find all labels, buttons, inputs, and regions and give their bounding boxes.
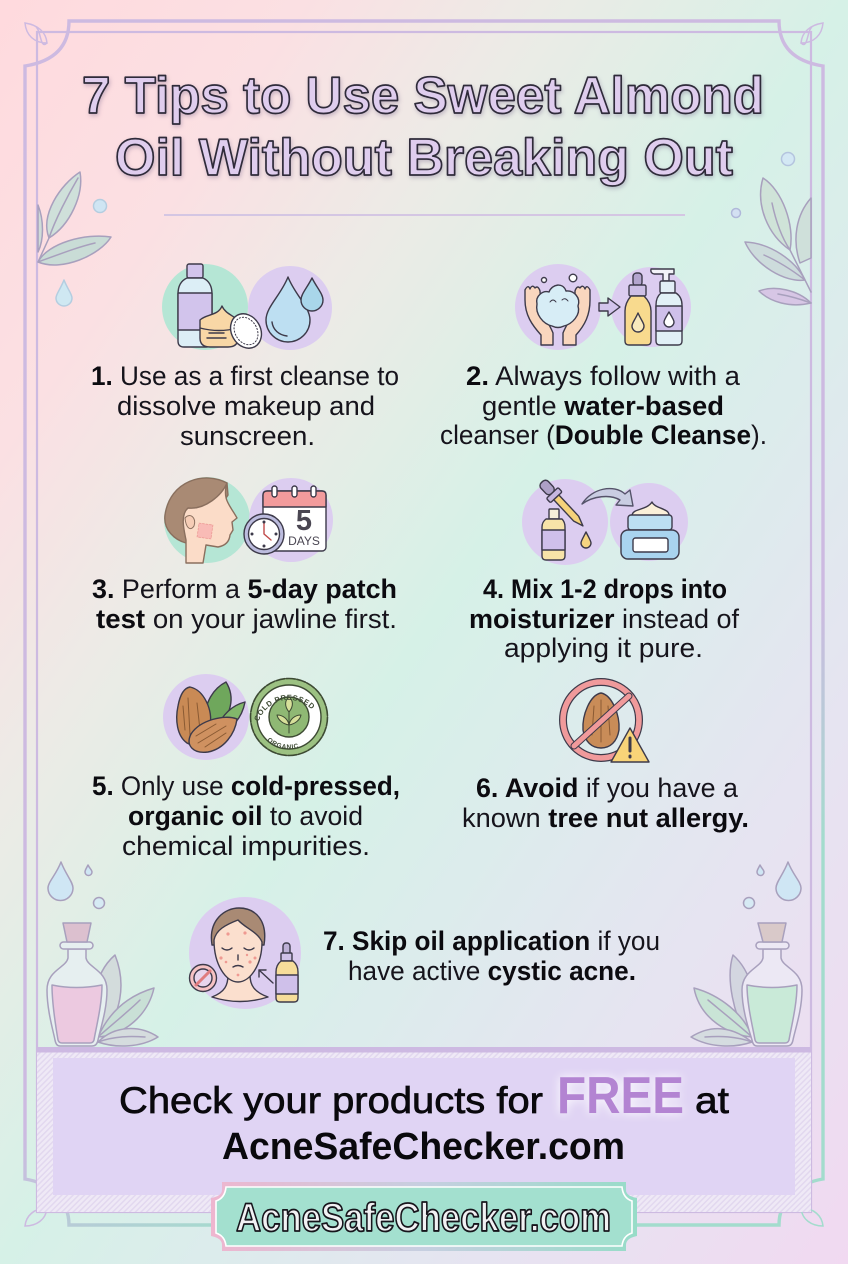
tip 1 text: 1. Use as a first cleanse to bbox=[91, 361, 399, 391]
icon 5: almonds and cold-pressed organic seal: ORGANIC bbox=[268, 738, 298, 748]
call-to-action text: FREE bbox=[557, 1067, 684, 1125]
tip 6 text: known tree nut allergy. bbox=[462, 803, 749, 833]
icon 5: almonds and cold-pressed organic seal bbox=[163, 674, 328, 760]
tip 3 text: 3. Perform a 5-day patch bbox=[92, 574, 397, 604]
call-to-action text: Check your products for bbox=[119, 1080, 543, 1121]
icon 7: face with acne, no oil bbox=[189, 897, 301, 1009]
tip 5 text: chemical impurities. bbox=[122, 831, 370, 861]
icon 5: almonds and cold-pressed organic seal: COLD PRESSED bbox=[254, 694, 314, 721]
tip 2 text: 2. Always follow with a bbox=[466, 361, 740, 391]
icon 3: patch test on jawline with calendar: 5 bbox=[296, 505, 312, 537]
call-to-action text: AcneSafeChecker.com bbox=[222, 1126, 625, 1168]
tip 4 text bbox=[469, 574, 740, 663]
decoration: left bottle, leaves and drops bbox=[47, 862, 158, 1046]
tip 4 text: moisturizer instead of bbox=[469, 604, 740, 634]
tip 7 text: 7. Skip oil application if you bbox=[323, 926, 660, 956]
tip 1 text: dissolve makeup and bbox=[117, 391, 375, 421]
icon 4: dropper into moisturizer jar bbox=[522, 477, 688, 565]
decoration: top-left leaves and drops bbox=[38, 172, 111, 306]
tip 2 text: gentle water-based bbox=[482, 391, 724, 421]
icon 1: cleansing oil bottle, jar and drops bbox=[162, 264, 332, 354]
tip 2 text bbox=[440, 361, 767, 450]
icon 2: foaming hands, arrow and water-based cleanser bbox=[515, 264, 691, 350]
decoration: top-right leaves and bubbles bbox=[732, 152, 811, 305]
call-to-action text bbox=[119, 1067, 730, 1168]
tip 3 text: test on your jawline first. bbox=[96, 604, 397, 634]
badge text: AcneSafeChecker.com bbox=[236, 1196, 611, 1240]
tip 5 text: 5. Only use cold-pressed, bbox=[92, 771, 400, 801]
tip 2 text: cleanser (Double Cleanse). bbox=[440, 420, 767, 450]
tip 7 text: have active cystic acne. bbox=[348, 956, 636, 986]
call-to-action band bbox=[37, 1047, 811, 1212]
title divider bbox=[164, 214, 685, 216]
call-to-action text: at bbox=[695, 1080, 730, 1121]
tip 4 text: 4. Mix 1-2 drops into bbox=[483, 574, 727, 604]
tip 4 text: applying it pure. bbox=[504, 633, 703, 663]
title bbox=[82, 67, 764, 187]
title: Oil Without Breaking Out bbox=[115, 129, 733, 187]
tip 7 text bbox=[323, 926, 660, 986]
icon 3: patch test on jawline with calendar: DAYS bbox=[288, 534, 320, 548]
tip 6 text bbox=[462, 773, 749, 833]
tip 6 text: 6. Avoid if you have a bbox=[476, 773, 738, 803]
tip 5 text bbox=[92, 771, 400, 861]
decoration: right bottle, leaves and drops bbox=[691, 862, 802, 1046]
website badge bbox=[211, 1182, 637, 1251]
tip 1 text: sunscreen. bbox=[180, 421, 315, 451]
icon 6: no almond prohibition with warning bbox=[563, 682, 649, 762]
title: 7 Tips to Use Sweet Almond bbox=[82, 67, 764, 125]
tip 1 text bbox=[91, 361, 399, 451]
tip 5 text: organic oil to avoid bbox=[128, 801, 363, 831]
icon 3: patch test on jawline with calendar bbox=[164, 477, 333, 563]
tip 3 text bbox=[92, 574, 397, 634]
